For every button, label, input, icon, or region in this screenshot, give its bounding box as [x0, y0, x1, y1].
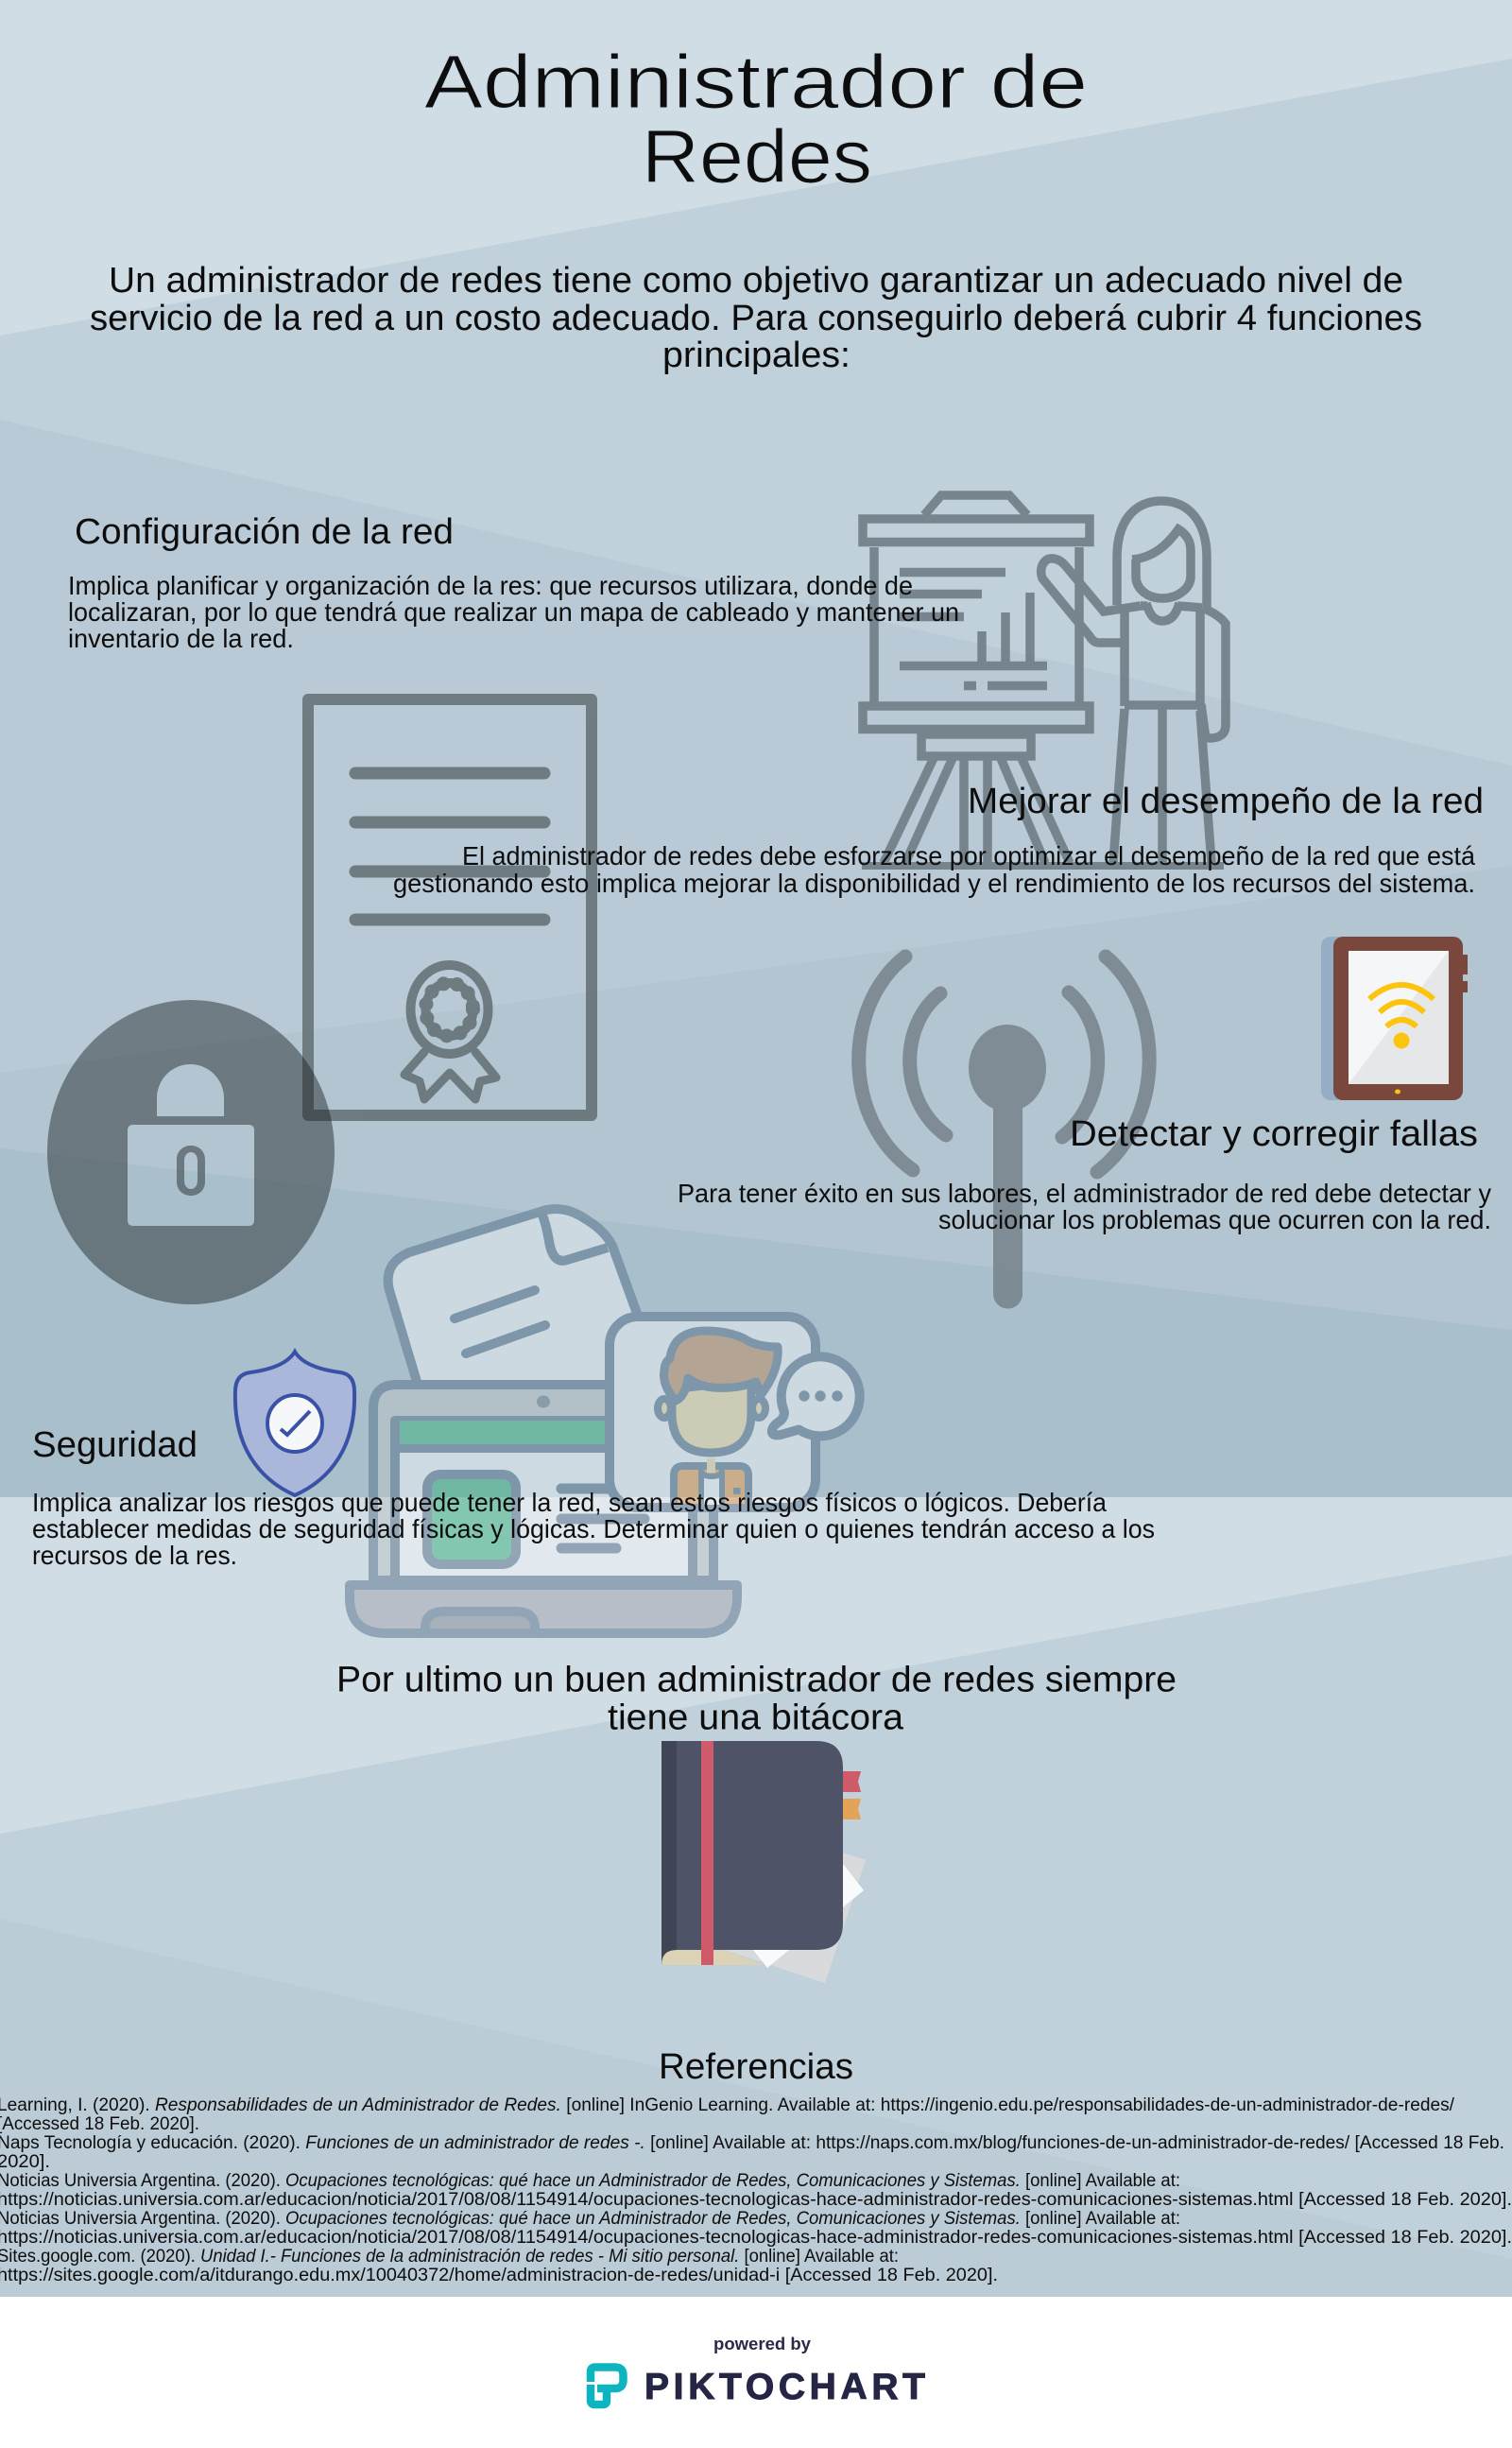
section: Mejorar el desempeño de la red — [393, 782, 1484, 898]
references list: https://noticias.universia.com.ar/educacion/noticia/2017/08/08/1154914/ocupaciones-tecnologicas-hace-administrador-redes-comunicaciones-sistemas.html [Accessed 18 Feb. 2020]. — [0, 2190, 1512, 2210]
title: Redes — [642, 114, 872, 198]
footer background — [0, 2297, 1512, 2448]
references list: [Accessed 18 Feb. 2020]. — [0, 2114, 199, 2134]
section: Seguridad — [32, 1425, 1155, 1570]
section: Detectar y corregir fallas: Para tener éxito en sus labores, el administrador de red debe detectar y — [678, 1179, 1491, 1208]
title — [424, 40, 1088, 198]
section: Configuración de la red: Configuración de la red — [75, 512, 454, 552]
references list: Sites.google.com. (2020). Unidad I.- Funciones de la administración de redes - Mi sitio personal. [online] Available at: — [0, 2247, 899, 2267]
section: Mejorar el desempeño de la red: El administrador de redes debe esforzarse por optimizar el desempeño de la red que está — [462, 841, 1475, 871]
laptop screen — [373, 1385, 713, 1580]
powered by Piktochart logo: PIKTOCHART — [644, 2367, 925, 2407]
section: Configuración de la red — [68, 512, 959, 653]
section: Configuración de la red: inventario de la red. — [68, 624, 294, 653]
icon: padlock in circle — [47, 1000, 335, 1304]
intro paragraph: principales: — [662, 336, 850, 375]
profile card — [610, 1317, 816, 1508]
section: Seguridad: establecer medidas de seguridad físicas y lógicas. Determinar quien o quienes tendrán acceso a los — [32, 1514, 1155, 1543]
closing statement: tiene una bitácora — [608, 1698, 904, 1737]
section: Detectar y corregir fallas: Detectar y corregir fallas — [1070, 1114, 1478, 1154]
section: Detectar y corregir fallas — [678, 1114, 1491, 1234]
background: lower section — [0, 1497, 1512, 2297]
intro paragraph — [90, 261, 1422, 375]
section: Mejorar el desempeño de la red: Mejorar el desempeño de la red — [968, 782, 1484, 821]
references list — [0, 2095, 1512, 2285]
icon: antenna signal tower — [859, 957, 1149, 1294]
section: Mejorar el desempeño de la red: gestionando esto implica mejorar la disponibilidad y el rendimiento de los recursos del sistema. — [393, 869, 1475, 898]
background: upper section — [0, 0, 1512, 1497]
references list: https://noticias.universia.com.ar/educacion/noticia/2017/08/08/1154914/ocupaciones-tecnologicas-hace-administrador-redes-comunicaciones-sistemas.html [Accessed 18 Feb. 2020]. — [0, 2228, 1512, 2248]
icon: notebook with bookmarks — [662, 1741, 866, 1983]
section: Configuración de la red: Implica planificar y organización de la res: que recursos utilizara, donde de — [68, 571, 913, 600]
references list: Noticias Universia Argentina. (2020). Ocupaciones tecnológicas: qué hace un Administrador de Redes, Comunicaciones y Sistemas. [online] Available at: — [0, 2171, 1180, 2191]
icon: security shield — [235, 1352, 354, 1495]
powered by Piktochart logo: powered by — [713, 2335, 811, 2353]
speech bubble — [772, 1356, 860, 1436]
icon: laptop with document and profile card — [350, 1209, 860, 1633]
document sheet — [388, 1209, 643, 1385]
icon: tablet with wifi — [1321, 937, 1468, 1100]
powered by Piktochart logo — [591, 2335, 925, 2407]
section: Seguridad: recursos de la res. — [32, 1541, 237, 1570]
icon: presenter with easel — [862, 495, 1226, 866]
references list: Learning, I. (2020). Responsabilidades de un Administrador de Redes. [online] InGenio Learning. Available at: https://ingenio.edu.pe/responsabilidades-de-un-administrador-de-redes/ — [0, 2095, 1455, 2115]
section: Detectar y corregir fallas: solucionar los problemas que ocurren con la red. — [938, 1205, 1491, 1234]
section: Seguridad: Implica analizar los riesgos que puede tener la red, sean estos riesgos físicos o lógicos. Debería — [32, 1488, 1107, 1517]
section: Configuración de la red: localizaran, por lo que tendrá que realizar un mapa de cableado y mantener un — [68, 597, 959, 627]
title: Administrador de — [424, 40, 1088, 124]
section: Seguridad: Seguridad — [32, 1425, 198, 1465]
laptop base — [350, 1585, 737, 1633]
references heading: Referencias — [659, 2047, 853, 2087]
intro paragraph: servicio de la red a un costo adecuado. Para conseguirlo deberá cubrir 4 funciones — [90, 299, 1422, 338]
closing statement — [336, 1660, 1177, 1737]
closing statement: Por ultimo un buen administrador de redes siempre — [336, 1660, 1177, 1699]
intro paragraph: Un administrador de redes tiene como objetivo garantizar un adecuado nivel de — [109, 261, 1403, 301]
references list: Naps Tecnología y educación. (2020). Funciones de un administrador de redes -. [online] Available at: https://naps.com.mx/blog/funciones-de-un-administrador-de-redes/ [Accessed 18 Feb. — [0, 2133, 1504, 2153]
icon: certificate — [308, 699, 592, 1115]
references list: Noticias Universia Argentina. (2020). Ocupaciones tecnológicas: qué hace un Administrador de Redes, Comunicaciones y Sistemas. [online] Available at: — [0, 2209, 1180, 2229]
references list: https://sites.google.com/a/itdurango.edu.mx/10040372/home/administracion-de-redes/unidad-i [Accessed 18 Feb. 2020]. — [0, 2266, 998, 2285]
